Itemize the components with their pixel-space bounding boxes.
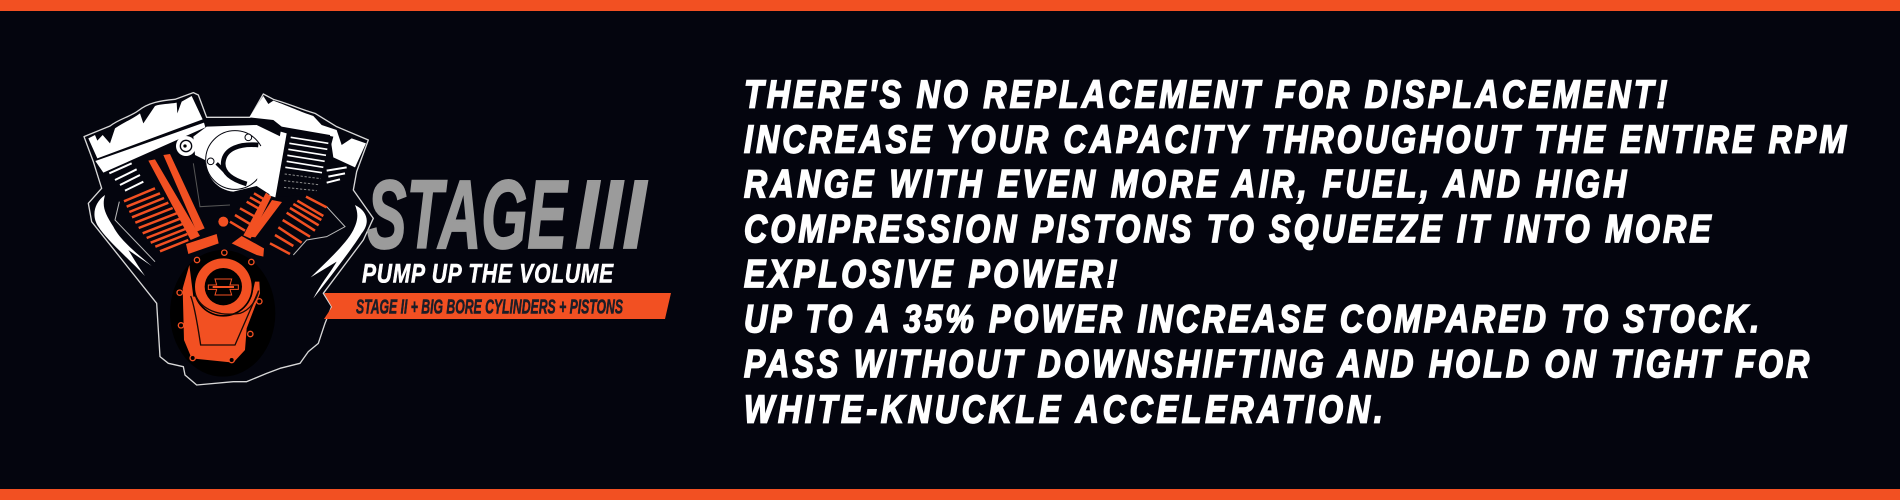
heading: Stage III: STAGE [367, 160, 569, 269]
left orange fins [124, 188, 188, 251]
line 8: WHITE-KNUCKLE ACCELERATION. [744, 388, 1383, 431]
line 5: EXPLOSIVE POWER! [744, 252, 1117, 296]
line 6: UP TO A 35% POWER INCREASE COMPARED TO STOCK. [744, 297, 1759, 341]
left pushrods and base [148, 154, 219, 254]
line 7: PASS WITHOUT DOWNSHIFTING AND HOLD ON TIGHT FOR [744, 342, 1809, 386]
line 4: COMPRESSION PISTONS TO SQUEEZE IT INTO MORE [744, 207, 1712, 251]
center valve orange [218, 217, 228, 227]
line 1: THERE'S NO REPLACEMENT FOR DISPLACEMENT! [744, 73, 1667, 116]
ribbon text: STAGE II + BIG BORE CYLINDERS + PISTONS [356, 296, 623, 318]
white cylinder fins [105, 143, 347, 191]
cover bolts [177, 250, 262, 363]
timing cover [183, 257, 260, 363]
bar and shield emblem [208, 279, 238, 295]
icon: v-twin engine [84, 93, 373, 385]
body text [744, 73, 1847, 431]
engine outline [84, 93, 373, 385]
bottom orange bar [0, 489, 1900, 500]
air cleaner cover [206, 131, 273, 192]
orange ribbon [324, 293, 671, 319]
top orange bar [0, 0, 1900, 11]
top body [193, 125, 281, 195]
left exhaust pipe [94, 195, 152, 276]
right exhaust pipe [311, 205, 367, 298]
line 3: RANGE WITH EVEN MORE AIR, FUEL, AND HIGH [744, 162, 1627, 206]
left cylinder head [88, 96, 203, 158]
right pushrods and base [232, 193, 282, 257]
subheading: Pump up the volume: PUMP UP THE VOLUME [362, 259, 614, 289]
inner pipe lines [115, 202, 345, 262]
air filter [269, 127, 333, 197]
heading: Stage III: III [575, 160, 648, 269]
rocker bolt [176, 136, 196, 156]
line 2: INCREASE YOUR CAPACITY THROUGHOUT THE ENTIRE RPM [744, 118, 1847, 161]
left head lower band [95, 123, 205, 173]
right cylinder head [249, 96, 366, 167]
right orange fins [230, 193, 327, 254]
engine crease line [193, 163, 230, 207]
dark crankcase shadow [170, 250, 275, 377]
